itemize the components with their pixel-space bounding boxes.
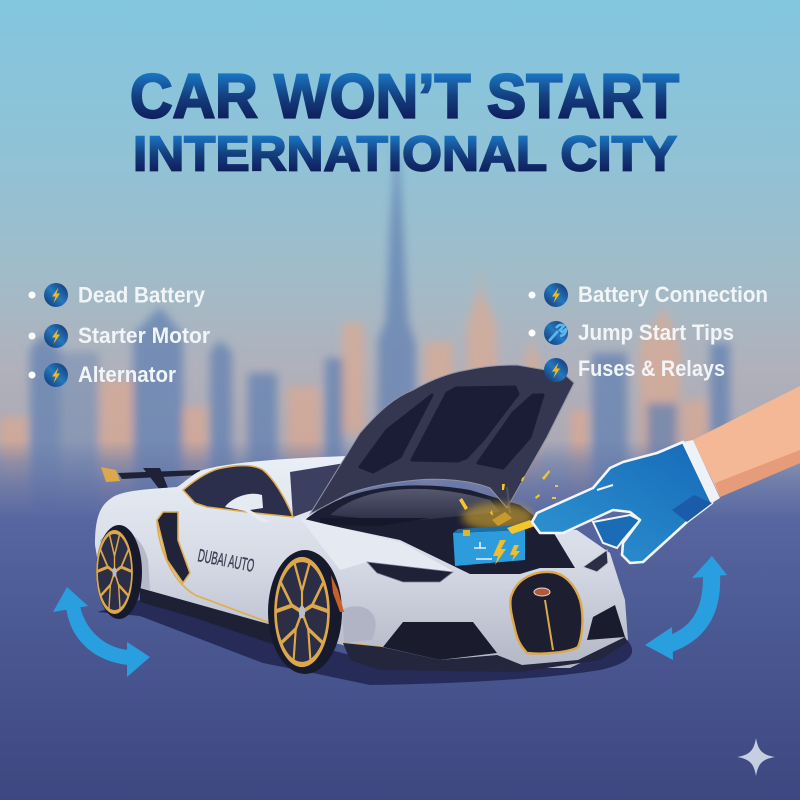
wrist shadow [672, 495, 712, 522]
item: Dead Battery: Dead Battery [78, 282, 206, 308]
bonnet left panel [360, 395, 432, 472]
wiper blades [320, 518, 430, 526]
bonnet stay [507, 487, 510, 513]
car body [95, 456, 628, 668]
lower splitter [343, 637, 628, 672]
bonnet right panel [478, 395, 543, 468]
gold side accent [157, 520, 270, 623]
gloved hand [532, 440, 720, 563]
grille centre bar [545, 600, 553, 650]
left headlight [367, 562, 453, 582]
battery terminal marks [474, 542, 492, 559]
bonnet centre panel [412, 387, 518, 461]
sparks [459, 470, 558, 534]
glove [532, 442, 712, 563]
lower rear shading [100, 531, 150, 590]
side mirror [225, 494, 270, 522]
item: Jump Start Tips: Jump Start Tips [578, 320, 734, 345]
side air intake [157, 512, 190, 583]
glove palm behind thumb [593, 515, 640, 548]
side window [183, 466, 293, 517]
fender top surface [300, 518, 455, 572]
front wing shading [342, 606, 376, 643]
forearm [693, 386, 800, 497]
door lettering: DUBAI AUTO [196, 545, 256, 576]
sparkle mark [737, 738, 775, 776]
right headlight [583, 550, 608, 572]
lower air intake [383, 622, 497, 660]
finger crease [597, 485, 613, 490]
ground plane [0, 440, 800, 800]
right rotation arrow [645, 556, 727, 660]
ground shadow [97, 600, 632, 685]
battery bolt 2 [510, 545, 520, 561]
title: INTERNATIONAL CITY [133, 126, 677, 182]
left rotation arrow [53, 587, 150, 677]
item: Alternator: Alternator [78, 362, 176, 387]
rear wing [101, 467, 200, 490]
engine cowl [330, 489, 500, 522]
front wheel [268, 550, 344, 674]
gold sill accent [343, 643, 382, 647]
open bonnet [310, 365, 574, 514]
battery terminal [463, 530, 470, 536]
glove cuff [683, 440, 720, 503]
right air intake [587, 605, 625, 640]
right list [528, 282, 768, 382]
rear wheel [96, 525, 142, 619]
left list [28, 282, 210, 387]
item: Dead Battery [28, 282, 206, 308]
item: Alternator [28, 362, 176, 387]
grille badge [534, 588, 550, 596]
side skirt [140, 588, 275, 645]
title: CAR WON’T START [130, 62, 679, 132]
item: Starter Motor: Starter Motor [78, 323, 210, 348]
title [130, 62, 679, 182]
spark glow [462, 503, 534, 531]
battery [453, 525, 525, 566]
sports car [95, 456, 628, 674]
horseshoe grille [510, 572, 582, 654]
blurred Dubai skyline [0, 148, 730, 510]
engine bay [305, 485, 575, 574]
battery bolt 1 [493, 540, 506, 565]
item: Fuses & Relays: Fuses & Relays [578, 356, 725, 381]
windshield [290, 463, 345, 517]
item: Battery Connection: Battery Connection [578, 282, 768, 307]
